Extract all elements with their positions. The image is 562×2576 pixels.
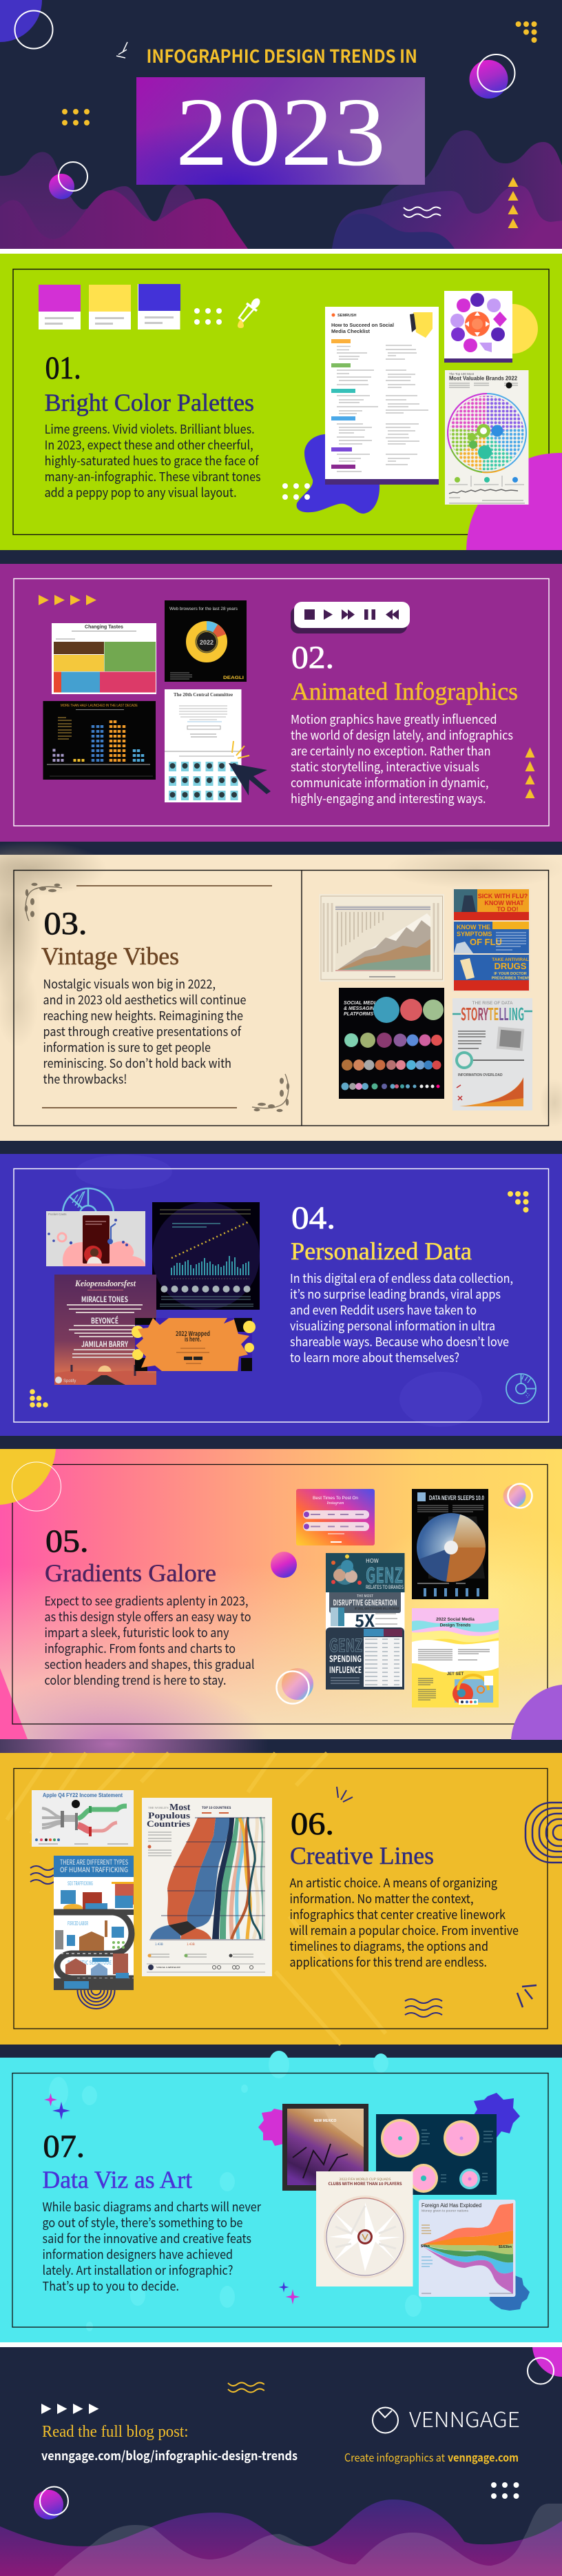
thumbnail: most populous countries: TOP 10 COUNTRIES (202, 1806, 231, 1810)
text: blog url: venngage.com/blog/infographic-design-trends (41, 2446, 298, 2464)
icon: sparkle stars lower (278, 2282, 300, 2304)
text: read the full blog post: Read the full blog post: (42, 2423, 189, 2441)
text block: communicate information in dynamic, (291, 773, 489, 791)
heading: Animated Infographics (291, 678, 518, 705)
number 05: 05. (45, 1523, 88, 1559)
thumbnail: gen z (326, 1553, 405, 1690)
thumbnail: most populous countries: 1.43B (187, 1943, 195, 1947)
thumbnail: flu comic: KNOW THE (457, 924, 490, 931)
heading: Creative Lines (290, 1842, 434, 1869)
text block: said for the innovative and creative feats (43, 2229, 251, 2247)
icon: yellow dots left (62, 109, 90, 125)
icon: yellow dots top right (516, 21, 537, 43)
thumbnail: social media design trends: JET SET (447, 1672, 464, 1676)
text block (44, 1592, 255, 1689)
thumbnail: gen z: SPENDING (329, 1652, 362, 1665)
thumbnail: data never sleeps: DATA NEVER SLEEPS 10.0 (429, 1494, 484, 1501)
thumbnail: changing tastes treemap (52, 623, 156, 694)
icons: control glyphs (304, 609, 399, 620)
thumbnail: human trafficking: FORCED LABOR (67, 1920, 88, 1927)
icon: large disc chart (63, 1188, 114, 1239)
text block: color blending trend is here to stay. (44, 1671, 226, 1689)
thumbnail: dot column chart: MORE THAN HALF LAUNCHED IN THE LAST DECADE (61, 704, 138, 708)
panel: header (0, 0, 562, 249)
decoration: top-left blue circle (0, 0, 42, 42)
icon: yellow waves (228, 2382, 264, 2392)
decoration: blue blob (297, 434, 386, 514)
thumbnail: world cup squads: CLUBS WITH MORE THAN 10 PLAYERS (328, 2181, 402, 2187)
thumbnail: social media checklist: Media Checklist (331, 328, 371, 334)
icon: white dots (491, 2482, 519, 2499)
thumbnail: social media design trends: Design Trends (440, 1623, 471, 1628)
thumbnail: web browsers donut: DEAGLI (223, 676, 244, 680)
icon: play arrows (39, 595, 96, 605)
thumbnail: 2022 wrapped (132, 1318, 256, 1371)
number 01: 01. (45, 350, 81, 386)
thumbnail: festival poster: Spotify (63, 1379, 76, 1383)
thumbnail: central committee portraits (165, 689, 241, 802)
panel: 02 animated infographics (0, 564, 562, 842)
thumbnail: gen z: RELATES TO BRANDS (366, 1583, 404, 1591)
panel: 05 gradients galore (0, 1449, 562, 1813)
thumbnail: dark data chart (152, 1202, 260, 1310)
thumbnail: world cup squads (316, 2171, 413, 2286)
thumbnail: gen z: GENZ (366, 1559, 403, 1589)
thumbnail: flower diagram (444, 291, 512, 363)
text block: That’s up to you to decide. (43, 2277, 179, 2295)
thumbnail: gen z: DISRUPTIVE GENERATION (333, 1597, 397, 1608)
thumbnail: gen z: GENZ (329, 1632, 362, 1657)
thumbnail: flu comic: SICK WITH FLU? (478, 893, 528, 900)
thumbnail: apple income statement: Apple Q4 FY22 Income Statement (43, 1792, 123, 1798)
thumbnail: festival poster (54, 1275, 156, 1385)
thumbnail: terrain art: NEW MEXICO (314, 2119, 336, 2123)
decoration: magenta blob (466, 453, 562, 550)
panel: 03 vintage vibes (0, 841, 562, 1141)
number 02: 02. (291, 640, 334, 676)
icon: media controls bar (291, 602, 410, 633)
text block: visualizing personal information in ultra (290, 1317, 495, 1335)
text block: information is sure to get people (43, 1038, 211, 1056)
thumbnail: gen z: THE MOST (357, 1594, 373, 1599)
icon: cursor sparks (232, 741, 249, 758)
icon: gradient ball and ring (34, 2487, 68, 2519)
thumbnail: data never sleeps (412, 1489, 488, 1599)
thumbnail: gen z: BY 2031, GEN Z'S INCOME WILL INCREASE (355, 1607, 399, 1611)
text block: and even Reddit users have taken to (290, 1301, 477, 1319)
decoration: yellow scallop (488, 304, 538, 354)
thumbnail: storytelling: THE RISE OF DATA (472, 1001, 513, 1006)
text block: infographics that center creative linework (289, 1905, 506, 1923)
text block: Motion graphics have greatly influenced (291, 710, 497, 728)
thumbnail: festival poster: Keiopensdoorsfest (74, 1278, 136, 1288)
icon: yellow dots bottom left (30, 1389, 48, 1408)
text block (289, 1874, 519, 1971)
text block: information. No matter the context, (289, 1889, 474, 1907)
heading: Bright Color Palettes (45, 389, 254, 416)
thumbnail: human trafficking: DOMESTIC SERVITUDE (67, 1959, 112, 1967)
thumbnail: most populous countries: Countries (147, 1818, 190, 1829)
text block: In this digital era of endless data collection, (290, 1269, 513, 1287)
thumbnail: human trafficking (54, 1856, 134, 1990)
thumbnail: most valuable brands (445, 370, 529, 505)
text block: applications for this trend are endless. (289, 1953, 487, 1971)
thumbnail: flu comic: KNOW WHAT (484, 900, 524, 906)
text: create infographics: Create infographics at (344, 2448, 445, 2465)
number 04: 04. (291, 1200, 335, 1236)
thumbnail: most populous countries: VISUAL CAPITALIST (156, 1966, 181, 1969)
thumbnail: flu comic: PRESCRIBES THEM! (492, 976, 530, 980)
text block: add a peppy pop to any visual layout. (45, 483, 237, 501)
text block: Lime greens. Vivid violets. Brilliant blues. (45, 420, 255, 438)
text block: highly-saturated hues to grace the face of (45, 452, 260, 469)
year box (136, 77, 425, 186)
number 03: 03. (44, 906, 87, 942)
thumbnail: gen z: 5X (355, 1608, 375, 1632)
thumbnail: planets social media (339, 988, 444, 1099)
thumbnail: web browsers donut (165, 600, 247, 682)
text block: many-an-infographic. These vibrant tones (45, 467, 261, 485)
decoration: yellow corner circle (0, 1449, 56, 1505)
thumbnail: web browsers donut: Web browsers for the last 28 years (169, 607, 238, 611)
heading: Data Viz as Art (43, 2166, 192, 2193)
thumbnail: vintage mountains chart (320, 894, 444, 982)
thumbnail: dot column chart (43, 701, 156, 780)
icon: cursor (229, 763, 271, 795)
text: venngage wordmark: VENNGAGE (409, 2403, 520, 2433)
thumbnail: most populous countries: 1.43B (155, 1943, 163, 1947)
text block: go out of style, there’s something to be (43, 2213, 243, 2231)
thumbnail: world cup squads: 2022 FIFA WORLD CUP SQUADS (339, 2178, 391, 2182)
thumbnail: flu comic: TO DO! (497, 906, 519, 913)
thumbnail: best times to post (296, 1489, 375, 1545)
decoration: blue burst (472, 2093, 520, 2140)
icon: color swatches (39, 284, 180, 329)
thumbnail: planets social media: SOCIAL MEDIA (344, 1001, 379, 1006)
thumbnail: storytelling: STORYTELLING (461, 1001, 524, 1025)
panel: 07 data viz as art (0, 2051, 562, 2342)
icon: pastel ball with ring lower (277, 1668, 313, 1704)
text block: An artistic choice. A means of organizing (289, 1874, 497, 1892)
icon: small disc chart (506, 1374, 536, 1403)
thumbnail: flu comic: IF YOUR DOCTOR (494, 972, 527, 976)
number 07: 07. (43, 2129, 85, 2164)
icon: eyedropper (238, 296, 262, 328)
thumbnail: foreign aid: Money given to poorer nations (422, 2209, 469, 2213)
text block: While basic diagrams and charts will never (43, 2198, 262, 2215)
thumbnail: foreign aid: Foreign Aid Has Exploded (422, 2202, 481, 2209)
thumbnail: central committee portraits: The 20th Central Committee (174, 692, 233, 698)
decoration: lower right burst (490, 2273, 530, 2311)
icon: gradient ball and ring right (470, 54, 515, 99)
icon: white dots (194, 308, 222, 325)
decoration: header left waves (0, 152, 248, 249)
text block: In 2023, expect these and other cheerful, (45, 436, 253, 454)
text block: static storytelling, interactive visuals (291, 758, 479, 775)
icon: sparks beside title (116, 42, 127, 58)
thumbnail: foreign aid: $4bn (421, 2244, 430, 2249)
decoration: magenta burst (258, 2109, 284, 2146)
decoration: top-left ring (15, 11, 52, 48)
thumbnail: 2022 wrapped: is here. (185, 1334, 201, 1343)
thumbnail: festival poster: JAMILAH BARRY (81, 1339, 128, 1350)
thumbnail: social media design trends (412, 1608, 499, 1707)
panel: 06 creative lines (0, 1753, 562, 2045)
heading: Vintage Vibes (41, 942, 179, 970)
thumbnail: most populous countries (142, 1798, 272, 1976)
icon: corner ornament bottom-right (252, 1074, 289, 1112)
panel: 04 personalized data (0, 1154, 562, 1436)
icon: white dots over blob (282, 483, 310, 500)
decoration: purple corner circle (511, 1685, 562, 1740)
icon: concentric rings below thumbnail (77, 1971, 114, 2009)
thumbnail: most populous countries: THE WORLD'S (148, 1806, 169, 1809)
text block: timelines to diagrams, the options and (289, 1937, 488, 1955)
thumbnail: podcast phone: Pocket Casts (48, 1213, 67, 1216)
thumbnail: most valuable brands: The Top 100 Most (449, 372, 475, 376)
thumbnail: planets social media: PLATFORMS (344, 1012, 373, 1017)
icon: yellow dots top right (508, 1191, 529, 1213)
thumbnail: planets social media: & MESSAGING (344, 1006, 378, 1011)
text block: highly-engaging and interesting ways. (291, 789, 486, 807)
thumbnail: flu comic: SYMPTOMS (457, 931, 492, 937)
icon: sparkle stars top (44, 2093, 70, 2120)
text block: lately. Art installation or infographic? (43, 2261, 233, 2279)
thumbnail: human trafficking: THERE ARE DIFFERENT TYPES (60, 1856, 128, 1867)
decoration: thin ring (12, 1462, 61, 1511)
icon: yellow triangles (508, 177, 518, 228)
text block: and in 2023 old aesthetics will continue (43, 991, 247, 1008)
icon: gradient ball and ring left (49, 162, 87, 199)
thumbnail: storytelling (452, 998, 532, 1110)
text block: impart a sleek, futuristic look to any (44, 1623, 229, 1641)
icon: sparks lower right (517, 1985, 537, 2007)
heading: Personalized Data (291, 1237, 472, 1265)
thumbnail: most valuable brands: Most Valuable Brands 2022 (449, 375, 518, 382)
text block (43, 975, 247, 1088)
thumbnail: flu comic (452, 888, 530, 992)
icon: triangles (525, 747, 534, 798)
text block (45, 420, 261, 501)
decoration: magenta corner circle (532, 2347, 562, 2377)
thumbnail: gen z: HOW (366, 1557, 379, 1565)
heading: Gradients Galore (45, 1559, 216, 1587)
number 06: 06. (291, 1806, 334, 1842)
thumbnail: apple income statement (32, 1790, 134, 1847)
text block (291, 710, 513, 807)
thumbnail: flu comic: DRUGS (495, 961, 527, 971)
icon: waves left (30, 1866, 54, 1884)
decoration: corner ring (528, 2357, 554, 2384)
thumbnail: web browsers donut: 2022 (200, 639, 214, 646)
decoration: header right waves (332, 130, 562, 249)
thumbnail: festival poster: BEYONCÉ (91, 1315, 118, 1326)
icon: waves lower right (405, 1999, 442, 2017)
thumbnail: best times to post: Best Times To Post On (313, 1496, 358, 1501)
panel: 01 bright color palettes (0, 254, 562, 550)
text block: as this design style offers an easy way to (44, 1608, 251, 1625)
decoration: footer waves (0, 2499, 562, 2576)
thumbnail: most populous countries: Populous (148, 1810, 190, 1821)
text block: are certainly no exception. Rather than (291, 742, 490, 760)
thumbnail: social media checklist (325, 307, 439, 485)
icon: white waves (404, 207, 441, 218)
thumbnail: human trafficking: OF HUMAN TRAFFICKING (60, 1864, 128, 1874)
text block: section headers and shapes, this gradual (44, 1655, 255, 1673)
text block: infographic. From fonts and charts to (44, 1639, 236, 1657)
panel: footer (0, 2347, 562, 2576)
text block: shareable ways. Because who doesn’t love (290, 1332, 509, 1350)
thumbnail: festival poster: MIRACLE TONES (81, 1294, 128, 1305)
thumbnail: best times to post: Instagram (326, 1501, 344, 1505)
thumbnail: social media checklist: SEMRUSH (337, 314, 357, 318)
icon: concentric rings right (525, 1803, 562, 1863)
text block: Nostalgic visuals won big in 2022, (43, 975, 216, 993)
thumbnail: 2022 wrapped: 2022 Wrapped (176, 1328, 210, 1338)
year: 2023 (176, 77, 386, 186)
thumbnail: gen z: INFLUENCE (329, 1663, 362, 1676)
text block: to learn more about themselves? (290, 1348, 459, 1366)
thumbnail: pink flowers (376, 2114, 497, 2195)
thumbnail: foreign aid: $163bn (499, 2245, 512, 2249)
text block: will remain a popular choice. From inventive (289, 1921, 519, 1939)
icon: white play arrows (41, 2404, 99, 2414)
text block: the world of design lately, and infographics (291, 726, 513, 744)
thumbnail: podcast phone (46, 1211, 145, 1266)
icon: gradient ball (271, 1552, 297, 1578)
text: venngage.com: venngage.com (448, 2448, 519, 2465)
thumbnail: changing tastes treemap: Changing Tastes (85, 625, 123, 630)
thumbnail: social media checklist: How to Succeed on Social (331, 322, 394, 328)
text block: past through creative presentations of (43, 1022, 242, 1040)
thumbnail: storytelling: INFORMATION OVERLOAD (458, 1073, 503, 1077)
thumbnail: foreign aid (419, 2200, 515, 2297)
thumbnail: social media design trends: 2022 Social Media (436, 1617, 475, 1622)
text block (290, 1269, 513, 1366)
icon: sparks near number (337, 1787, 353, 1802)
thumbnail: flu comic: OF FLU (470, 937, 502, 947)
icon: venngage logo (373, 2407, 398, 2433)
icon: pastel ball with ring upper (503, 1483, 532, 1508)
text block: reminiscing. So don’t hold back with (43, 1054, 231, 1072)
thumbnail: terrain art (282, 2104, 368, 2191)
text block: reaching new heights. Reimagining the (43, 1006, 243, 1024)
text block: Expect to see gradients aplenty in 2023, (44, 1592, 248, 1610)
text block: it’s no surprise leading brands, viral apps (290, 1285, 501, 1303)
icon: corner ornament top-left (25, 883, 62, 921)
thumbnail: flu comic: TAKE ANTIVIRAL (492, 957, 529, 962)
thumbnail: human trafficking: SEX TRAFFICKING (67, 1880, 93, 1887)
text block (43, 2198, 262, 2295)
thumbnail: most populous countries: Most (169, 1803, 191, 1813)
text block: the throwbacks! (43, 1070, 127, 1088)
title: INFOGRAPHIC DESIGN TRENDS IN (146, 43, 417, 68)
text block: information designers have achieved (43, 2245, 233, 2263)
